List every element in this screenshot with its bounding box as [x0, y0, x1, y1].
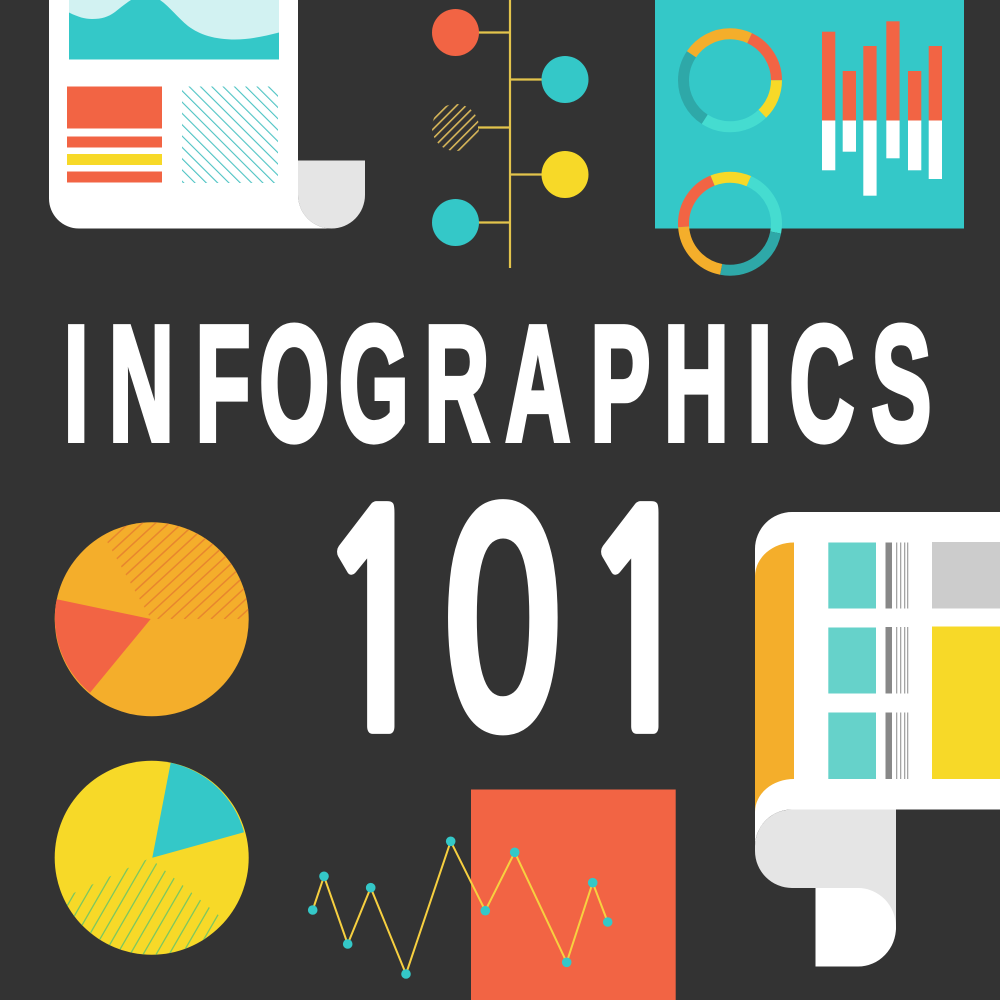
panel: teal dashboard: [655, 0, 964, 270]
barcode stripes 1: [886, 542, 908, 608]
barcode stripes 3: [886, 712, 908, 779]
text line 2: [67, 154, 162, 165]
diverging bar chart: [822, 21, 942, 196]
hatched block: [182, 86, 278, 183]
barcode stripes 2: [886, 627, 908, 694]
teal block 2: [828, 628, 876, 694]
hatched sector: [108, 522, 248, 619]
hatched sector: [67, 860, 218, 955]
panel: red rectangle: [471, 790, 676, 1000]
orange inner fold: [755, 542, 794, 812]
text line 3: [67, 172, 162, 182]
title: INFOGRAPHICS: [64, 293, 931, 476]
node 4: [542, 151, 588, 198]
teal block 1: [828, 542, 876, 608]
node 3 hatched: [432, 104, 479, 151]
yellow pie base: [55, 761, 249, 955]
curled page corner: [298, 160, 365, 228]
data points: [308, 836, 612, 979]
page sheet: [49, 0, 332, 228]
teal slice: [152, 763, 244, 858]
panel: scroll document: [755, 512, 1000, 966]
grey rolled fold: [755, 810, 896, 930]
node 1: [432, 9, 479, 56]
teal background: [655, 0, 964, 228]
scroll sheet: [755, 512, 1000, 845]
orange text block: [67, 86, 162, 128]
node 2: [542, 56, 588, 103]
teal block 3: [828, 712, 876, 779]
red slice: [55, 599, 151, 693]
panel: orange pie chart: [54, 522, 249, 716]
white tail: [816, 888, 896, 966]
orange pie base: [55, 522, 249, 716]
panel: document with area chart: [49, 0, 365, 228]
donut ring 1: [684, 34, 776, 127]
line: [313, 841, 608, 974]
timeline connectors: [478, 0, 542, 268]
grey block: [932, 542, 1000, 608]
panel: yellow pie chart: [54, 760, 249, 955]
heading number 101: 101: [313, 481, 704, 775]
donut ring 2: [684, 177, 776, 270]
node 5: [432, 199, 479, 246]
yellow block: [932, 626, 1000, 779]
panel: timeline: [432, 0, 588, 268]
area chart wave: [69, 0, 279, 60]
area chart background: [69, 0, 279, 60]
line chart: [308, 836, 612, 979]
text line 1: [67, 136, 162, 148]
